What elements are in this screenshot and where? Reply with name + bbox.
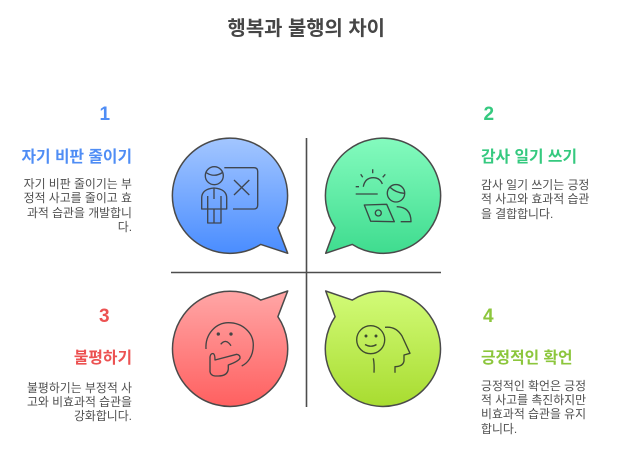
icon: person with x board <box>202 167 258 223</box>
body 1 <box>24 177 132 234</box>
body 2: 감사 일기 쓰기는 긍정 <box>481 178 589 192</box>
body 1: 정적 사고를 줄이고 효 <box>24 191 132 205</box>
body 3: 강화합니다. <box>74 409 132 423</box>
body 3: 고와 비효과적 습관을 <box>27 395 132 409</box>
number 1: 1 <box>100 104 110 125</box>
body 2 <box>481 178 589 221</box>
body 4: 긍정적인 확언은 긍정 <box>481 378 586 392</box>
icon: smiling face and head profile <box>357 326 410 373</box>
body 4: 비효과적 습관을 유지 <box>481 407 586 421</box>
panel: item 3 <box>27 306 132 423</box>
heading 3: 불평하기 <box>74 350 132 367</box>
body 4 <box>481 378 586 436</box>
number 2: 2 <box>484 104 494 125</box>
number 3: 3 <box>99 306 110 327</box>
number 4: 4 <box>483 306 494 327</box>
heading 4: 긍정적인 확언 <box>481 350 573 367</box>
panel: item 4 <box>481 306 586 436</box>
body 2: 을 결합합니다. <box>481 207 553 221</box>
panel: item 2 <box>481 104 589 221</box>
body 2: 적 사고와 효과적 습관 <box>481 192 589 206</box>
body 1: 자기 비판 줄이기는 부 <box>24 177 132 191</box>
body 4: 적 사고를 촉진하지만 <box>481 393 586 407</box>
body 4: 합니다. <box>481 422 517 436</box>
heading 1: 자기 비판 줄이기 <box>21 149 132 166</box>
bubble: lime <box>325 291 441 406</box>
body 1: 다. <box>118 220 132 234</box>
bubble: blue <box>172 138 288 253</box>
icon: thinking face <box>206 323 253 376</box>
body 3: 불평하기는 부정적 사 <box>27 380 132 394</box>
icon: sun, laptop and person <box>356 169 411 222</box>
body 1: 과적 습관을 개발합니 <box>27 206 132 220</box>
heading 2: 감사 일기 쓰기 <box>481 149 577 166</box>
title: 행복과 불행의 차이 <box>228 18 385 40</box>
bubble: green <box>325 138 441 253</box>
body 3 <box>27 380 132 423</box>
bubble: red <box>172 291 288 406</box>
panel: item 1 <box>21 104 132 234</box>
